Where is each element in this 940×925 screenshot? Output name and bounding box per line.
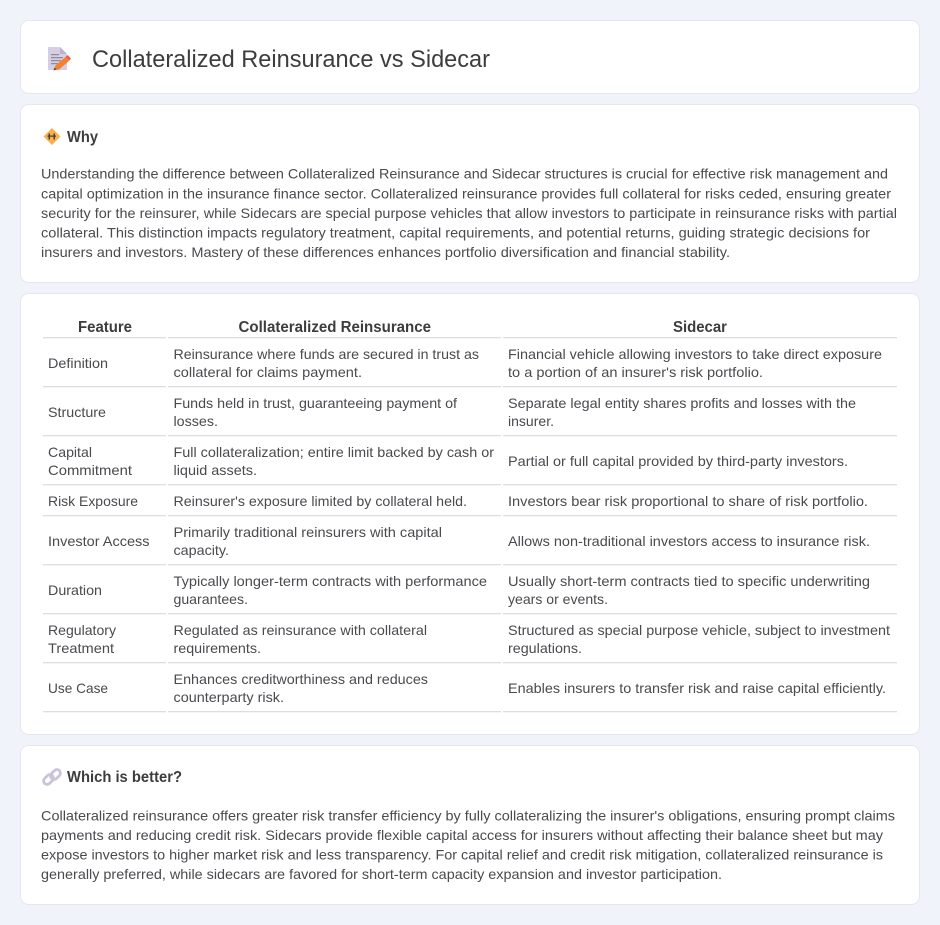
text block: which is better paragraph: Collateralized reinsurance offers greater risk transfer efficiency by fully collateralizing the insurer's obligations, ensuring prompt claims [41,808,895,824]
row: regulatory treatment: Structured as special purpose vehicle, subject to investment [508,622,890,638]
text block: why paragraph: insurers and investors. Mastery of these differences enhances portfolio diversification and financial stability. [41,244,730,260]
panel: which is better [20,746,920,904]
row: definition: Reinsurance where funds are secured in trust as [174,346,479,362]
row: investor access [48,524,870,558]
table header row: Feature [78,319,132,336]
row: definition: Definition [48,355,108,371]
row: definition: Financial vehicle allowing investors to take direct exposure [508,346,882,362]
row: investor access: capacity. [174,542,229,558]
text block: why paragraph: Understanding the difference between Collateralized Reinsurance and Sidecar structures is crucial for effective risk management and [41,166,888,182]
row: use case: Enables insurers to transfer risk and raise capital efficiently. [508,680,886,696]
row: use case: counterparty risk. [174,689,284,705]
icon: chain link [42,768,62,786]
row: definition [48,346,882,380]
row: use case: Use Case [48,680,108,696]
row: duration: Duration [48,582,102,598]
text block: why paragraph: capital optimization in the insurance finance sector. Collateralized reinsurance provides full collateral for risks ceded, ensuring greater [41,186,891,202]
text block: which is better paragraph: expose investors to higher market risk and less transparency. For capital relief and credit risk mitigation, collateralized reinsurance is [41,846,883,862]
row: capital commitment: liquid assets. [174,462,257,478]
row: investor access: Allows non-traditional investors access to insurance risk. [508,533,870,549]
table header row: Collateralized Reinsurance [238,319,431,336]
heading: why: Why [67,129,98,146]
row: structure: Separate legal entity shares profits and losses with the [508,395,856,411]
text block: which is better paragraph: generally preferred, while sidecars are favored for short-term capacity expansion and investor participation. [41,866,722,882]
row: capital commitment: Capital [48,444,92,460]
row: duration [48,573,870,607]
heading: which is better: Which is better? [67,769,182,786]
row: capital commitment [48,444,848,478]
row: capital commitment: Commitment [48,462,132,478]
table header row: Sidecar [673,319,727,336]
row: duration: Typically longer-term contracts with performance [174,573,487,589]
panel: why [20,104,920,282]
title: Collateralized Reinsurance vs Sidecar [92,46,490,73]
row: regulatory treatment: Regulated as reinsurance with collateral [174,622,427,638]
panel: comparison table [20,294,920,734]
row: investor access: Primarily traditional reinsurers with capital [174,524,442,540]
row: capital commitment: Full collateralization; entire limit backed by cash or [174,444,494,460]
row: regulatory treatment: requirements. [174,640,261,656]
row: risk exposure [48,493,868,509]
row: duration: guarantees. [174,591,248,607]
row: structure: Structure [48,404,106,420]
row: risk exposure: Reinsurer's exposure limited by collateral held. [174,493,467,509]
text block: which is better paragraph [41,808,895,882]
row: duration: years or events. [508,591,608,607]
row: risk exposure: Risk Exposure [48,493,138,509]
row: definition: collateral for claims payment. [174,364,362,380]
text block: why paragraph [41,166,897,260]
row: structure [48,395,856,429]
row: structure: Funds held in trust, guaranteeing payment of [174,395,457,411]
row: risk exposure: Investors bear risk proportional to share of risk portfolio. [508,493,868,509]
table header row [78,319,727,336]
icon: document with pencil [48,47,71,70]
icon: warning diamond [44,128,60,145]
row: regulatory treatment: regulations. [508,640,582,656]
panel: title header [20,20,920,94]
row: use case: Enhances creditworthiness and reduces [174,671,428,687]
row: definition: to a portion of an insurer's risk portfolio. [508,364,763,380]
text block: which is better paragraph: payments and reducing credit risk. Sidecars provide flexible capital access for insurers without affecting their balance sheet but may [41,827,883,843]
row: use case [48,671,886,705]
row: capital commitment: Partial or full capital provided by third-party investors. [508,453,848,469]
text block: why paragraph: collateral. This distinction impacts regulatory treatment, capital requirements, and potential returns, guiding strategic decisions for [41,224,870,240]
text block: why paragraph: security for the reinsurer, while Sidecars are special purpose vehicles that allow investors to participate in reinsurance risks with partial [41,205,897,221]
row: structure: losses. [174,413,218,429]
row: regulatory treatment: Treatment [48,640,114,656]
row: structure: insurer. [508,413,554,429]
row: regulatory treatment: Regulatory [48,622,116,638]
row: duration: Usually short-term contracts tied to specific underwriting [508,573,870,589]
row: regulatory treatment [48,622,890,656]
row: investor access: Investor Access [48,533,150,549]
